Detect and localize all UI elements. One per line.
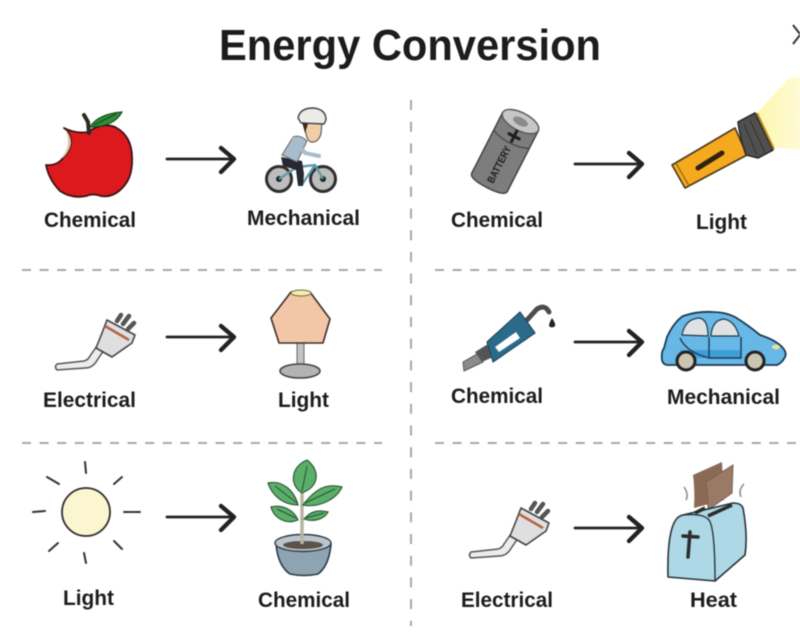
arrow bbox=[167, 506, 234, 530]
arrow bbox=[575, 331, 642, 355]
label: Mechanical: Mechanical bbox=[667, 386, 780, 409]
icon: cyclist bbox=[266, 108, 336, 192]
icon: flashlight bbox=[672, 113, 774, 188]
icon: car bbox=[662, 312, 786, 370]
label: Electrical: Electrical bbox=[461, 589, 553, 612]
close icon fragment bbox=[793, 25, 800, 44]
icon: toaster bbox=[668, 462, 746, 581]
icon: light beam bbox=[758, 77, 800, 150]
arrow bbox=[167, 148, 234, 172]
panel: fuel nozzle to car bbox=[451, 307, 786, 409]
label: Light: Light bbox=[696, 211, 747, 234]
icon: plug bbox=[56, 315, 135, 370]
dashed dividers bbox=[22, 100, 800, 626]
panel: plug to lamp bbox=[43, 290, 330, 412]
label: Heat: Heat bbox=[690, 589, 737, 612]
label: Light: Light bbox=[278, 389, 329, 412]
label: Chemical: Chemical bbox=[451, 209, 543, 232]
arrow bbox=[575, 153, 642, 177]
label: Electrical: Electrical bbox=[43, 389, 136, 412]
icon: battery bbox=[469, 104, 542, 197]
label: Light: Light bbox=[63, 587, 114, 610]
icon: plug bbox=[470, 503, 549, 558]
label: Mechanical: Mechanical bbox=[247, 207, 360, 230]
label: Chemical: Chemical bbox=[451, 385, 543, 408]
icon: potted plant bbox=[268, 460, 342, 576]
panel: plug to toaster bbox=[461, 462, 746, 612]
label: Chemical: Chemical bbox=[44, 209, 136, 232]
icon: apple bbox=[46, 112, 132, 197]
icon: battery: BATTERY bbox=[485, 144, 514, 185]
panel: battery to flashlight bbox=[451, 77, 800, 234]
arrow bbox=[167, 326, 234, 350]
arrow bbox=[575, 517, 642, 541]
icon: sun bbox=[33, 462, 140, 563]
label: Chemical: Chemical bbox=[258, 589, 350, 612]
panel: apple to cyclist bbox=[44, 108, 360, 232]
panel: sun to plant bbox=[33, 460, 350, 612]
icon: lamp bbox=[271, 290, 330, 378]
icon: fuel nozzle bbox=[463, 307, 555, 371]
title: Energy Conversion bbox=[219, 21, 601, 70]
